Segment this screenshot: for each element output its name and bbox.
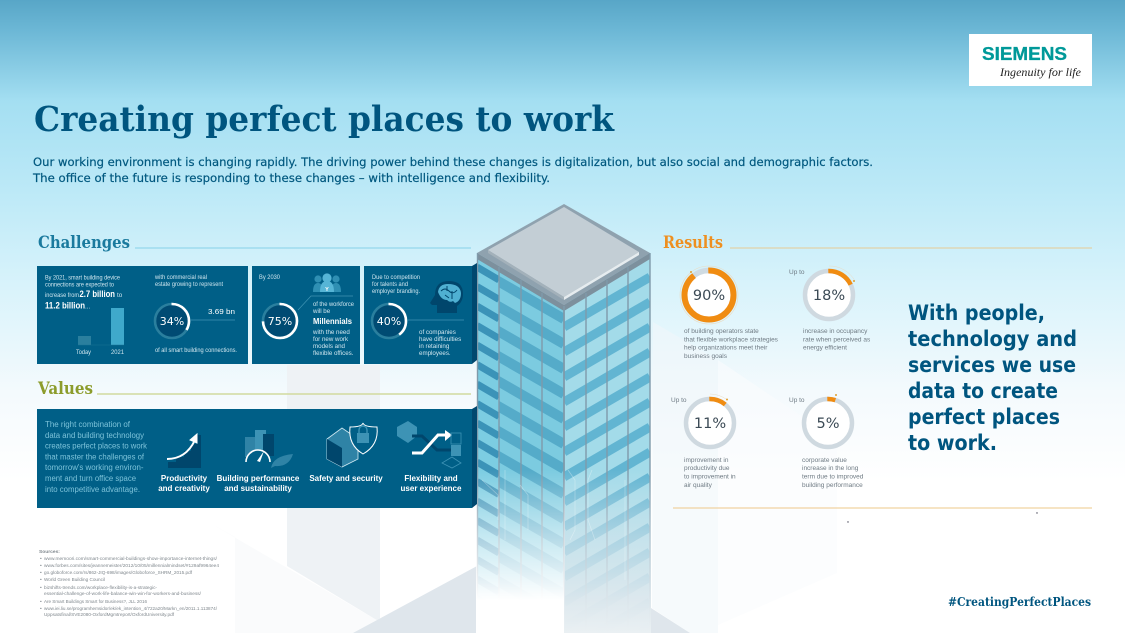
text: competition: employer branding. [372,288,420,295]
text: workforce: flexible offices. [313,350,354,357]
text: competition: for talents and [372,281,409,288]
sources: bizshifts-trends.com/workplace-flexibility-is-a-strategic- [44,585,157,591]
statement: perfect places [908,405,1060,429]
text: workforce: Millennials [313,317,353,326]
intro text [32,155,873,185]
sources: World Green Building Council [44,577,105,583]
building [476,204,651,633]
text: values description: ment and turn office space [45,474,137,483]
panel: values [37,406,477,508]
stat: 18%: rate when perceived as [803,336,871,344]
text: connections forecast: 2.7 billion [80,289,115,299]
text: by 2030: By 2030 [259,274,281,281]
label: productivity: and creativity [158,484,210,493]
text: competition [372,274,421,295]
panel: smart building connections [37,266,248,364]
text: commercial real estate: estate growing to represent [155,281,223,288]
stat: 18%: energy efficient [803,344,847,352]
text: companies: of companies [419,329,456,336]
sources: • [40,600,42,605]
text: competition: Due to competition [372,274,421,281]
statement [908,301,1077,455]
logo: Ingenuity for life [999,65,1082,79]
bar chart: today vs 2021: 2021 [111,349,125,356]
stat: 11%: productivity due [684,465,730,472]
text: companies [419,329,461,357]
text: values description: creates perfect places to work [45,442,148,451]
text: values description: into competitive advantage. [45,485,140,494]
stat: 90%: help organizations meet their [684,344,768,352]
results bottom rule [673,508,1092,523]
statement: services we use [908,353,1076,377]
stat: 11%: 11% [694,416,726,432]
ring: 75%: 75% [268,315,292,328]
intro text: The office of the future is responding to these changes – with intelligence and flexibility. [32,171,550,185]
icon: flexibility arrows [397,421,461,468]
text: commercial real estate [154,274,223,288]
statement: data to create [908,379,1058,403]
sources [39,549,219,618]
background ghost buildings [210,322,837,633]
sources: www.memoori.com/smart-commercial-buildings-show-importance-internet-things/ [44,556,218,562]
stat: 5%: 5% [816,416,840,432]
label: flexibility: user experience [401,484,462,493]
stat: 5%: increase in the long [802,465,859,472]
text: workforce: with the need [312,329,350,336]
text: connections forecast: connections are expected to [45,282,114,288]
text: connections forecast: increase from [45,292,79,299]
stat: 90%: 90% [693,288,725,304]
leader line [298,296,353,310]
stat: 11%: to improvement in [684,474,736,480]
icon: growth arrow [167,434,201,468]
heading: challenges: Challenges [38,233,130,253]
hashtag: #CreatingPerfectPlaces [948,595,1091,609]
stat: 18% [789,266,871,352]
stat: 18%: increase in occupancy [803,328,868,335]
label: productivity: Productivity [161,474,208,483]
stat: 5%: corporate value [802,457,847,464]
stat: 5%: building performance [802,482,863,489]
stat: 11% [671,394,736,489]
text: values description: The right combination of [45,420,131,429]
label: building performance [217,474,300,493]
leader line [407,319,464,321]
text: workforce: will be [312,308,331,315]
text: workforce [312,301,355,357]
bar chart: today vs 2021: Today [76,349,92,356]
heading: results: Results [663,233,723,253]
stat: 90%: business goals [684,353,728,360]
text: workforce: models and [313,343,346,350]
callout: 3.69 bn: 3.69 bn [208,307,235,316]
label: flexibility [401,474,462,493]
icon: building and gauge [245,430,293,468]
logo: SIEMENS [982,44,1067,64]
text: companies: employees. [419,350,451,357]
label: safety: Safety and security [309,474,383,483]
text: workforce: of the workforce [313,301,355,308]
text: connections forecast: ... [85,304,90,310]
stat: 90%: that flexible workplace strategies [684,336,779,344]
text: connections forecast [45,274,123,310]
sources: • [40,607,42,612]
text: values description: data and building technology [45,431,144,440]
text: values description: that master the challenges of [45,452,145,462]
text: companies: in retaining [419,343,450,350]
stat: 5%: term due to improved [802,474,864,480]
panel: talent retention [364,263,477,364]
sources: • [40,564,42,569]
logo [969,34,1092,86]
intro text: Our working environment is changing rapidly. The driving power behind these changes is digitalization, but also social and demographic factors. [33,155,873,169]
text: connections forecast: to [117,292,123,299]
label: building performance: and sustainability [224,484,292,493]
stat: 90%: of building operators state [684,328,759,335]
sources: essential-challenge-of-work-life-balance-win-win-for-workers-and-business/ [44,591,202,597]
stat: 18%: Up to [789,269,805,276]
sources: • [40,578,42,583]
icon: brain head [430,281,463,313]
statement: With people, [908,301,1045,325]
sources: Uppsatsfinal/SVE2080-OxfordMgmtreport/OxfordUniversity.pdf [44,612,175,618]
bar chart: today vs 2021 [76,308,125,356]
text: values description: tomorrow's working environ- [45,463,144,472]
icon: people: Y [325,287,329,293]
sources: www.iei.liu.se/programhemsidor/ek/ek_intention_4/722a20/Markn_en/2011.1.113874/ [44,606,218,612]
text: workforce: for new work [313,336,349,343]
sources: Are Smart Buildings Smart for Business?, JLL 2016 [44,599,147,605]
stat: 90% [680,266,779,360]
text: companies: have difficulties [419,336,461,343]
text: connections share: of all smart building connections. [155,347,237,354]
statement: to work. [908,431,997,455]
ring: 34% [155,304,189,338]
label: productivity [158,474,210,493]
panel: millennials [252,266,360,364]
sources: go.globoforce.com/rs/862-JIQ-698/images/Globoforce_SHRM_2015.pdf [44,570,193,576]
stat: 18%: 18% [813,288,845,304]
stat: 5%: Up to [789,397,805,404]
label: flexibility: Flexibility and [404,474,458,483]
icon: building and shield [327,423,377,467]
sources: www.forbes.com/sites/jeannemeister/2012/10/05/millennialmindset/#129af9964ee4 [44,563,219,569]
ring: 34%: 34% [160,315,184,328]
label: building performance: Building performance [217,474,300,483]
text: commercial real estate: with commercial real [154,274,207,281]
sources: • [40,586,42,591]
sources: Sources: [39,549,60,555]
callout: 3.69 bn [190,307,235,320]
sources: • [40,557,42,562]
statement: technology and [908,327,1077,351]
text: connections forecast: By 2021, smart building device [45,274,120,282]
text: connections forecast: 11.2 billion [45,300,85,310]
stat: 11%: air quality [684,482,713,489]
sources: • [40,571,42,576]
stat: 11%: improvement in [684,457,729,464]
stat: 11%: Up to [671,397,687,404]
title: Creating perfect places to work [34,99,615,140]
heading: values: Values [37,379,93,399]
text: values description [45,420,148,494]
stat: 5% [789,394,864,489]
ring: 40%: 40% [377,315,401,328]
